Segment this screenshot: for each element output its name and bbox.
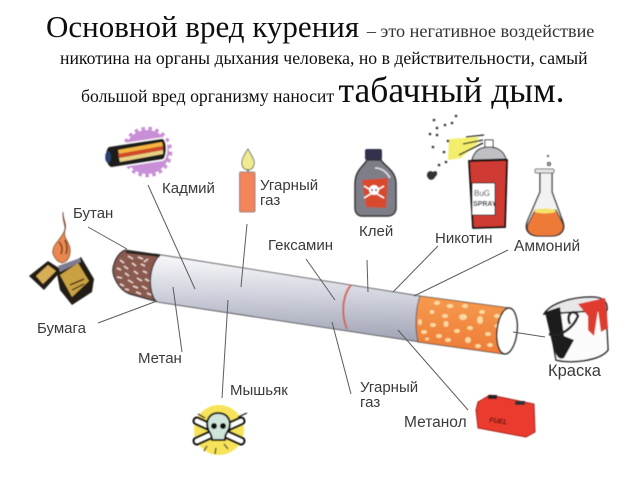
icon: fuel can bbox=[476, 395, 535, 437]
fuel can label text: FUEL bbox=[489, 417, 508, 427]
icon: paint can bbox=[544, 297, 608, 362]
red band bbox=[343, 285, 351, 329]
label: glue: Клей bbox=[359, 223, 393, 240]
label: carbon monoxide top: газ bbox=[260, 192, 280, 209]
label: hexamine: Гексамин bbox=[268, 237, 333, 254]
filter mouth end bbox=[495, 307, 519, 355]
label: methanol: Метанол bbox=[404, 414, 467, 431]
label: cadmium: Кадмий bbox=[162, 180, 215, 197]
label: butane: Бутан bbox=[73, 205, 113, 222]
label: carbon monoxide bottom: Угарный bbox=[360, 379, 418, 396]
skull mark bbox=[364, 185, 384, 198]
title line 1: Основной вред курения – это негативное воздействие bbox=[46, 9, 594, 44]
burning tobacco tip bbox=[113, 250, 160, 301]
label: arsenic: Мышьяк bbox=[230, 382, 288, 399]
icon: flask bbox=[526, 155, 564, 236]
label: carbon monoxide top: Угарный bbox=[260, 177, 318, 194]
leader lines bbox=[88, 185, 545, 410]
label: paint: Краска bbox=[548, 362, 602, 380]
label: methane: Метан bbox=[138, 350, 182, 367]
title bbox=[46, 9, 594, 110]
cigarette bbox=[113, 250, 519, 355]
spray can label text: BuG bbox=[474, 189, 490, 198]
icon: candle bbox=[240, 149, 255, 212]
label: ammonia: Аммоний bbox=[514, 238, 580, 255]
icon: spray can bbox=[427, 115, 507, 228]
label: paper: Бумага bbox=[37, 320, 87, 337]
title line 2: никотина на органы дыхания человека, но в действительности, самый bbox=[60, 48, 588, 68]
filter bbox=[416, 296, 516, 354]
icon: skull and crossbones bbox=[194, 405, 247, 455]
label: nicotine: Никотин bbox=[435, 230, 492, 247]
labels bbox=[37, 177, 602, 431]
cigarette paper bbox=[149, 254, 420, 342]
label: carbon monoxide bottom: газ bbox=[360, 394, 380, 411]
title line 3: большой вред организму наносит табачный дым. bbox=[81, 70, 564, 110]
icon: lighter bbox=[29, 212, 94, 305]
icon: glue bottle bbox=[355, 149, 396, 216]
icon: spray can: SPRAY bbox=[473, 201, 497, 208]
icon: battery bbox=[105, 128, 170, 176]
